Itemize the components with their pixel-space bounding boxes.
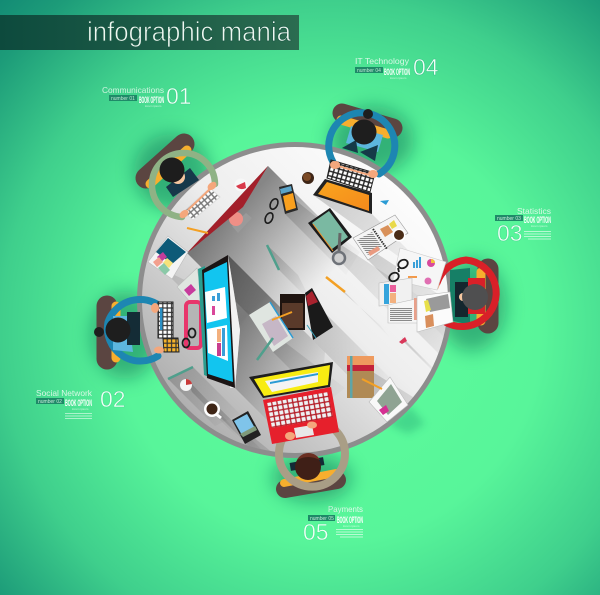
label: 04 it technology xyxy=(355,54,439,80)
open spiral notebook xyxy=(353,215,408,260)
laptop keyboard xyxy=(267,392,333,428)
blue paper plane xyxy=(380,200,389,205)
label: 01 communications: number 01 xyxy=(111,96,135,102)
shirt and trousers xyxy=(113,312,140,352)
hands xyxy=(178,180,218,220)
teal gap xyxy=(450,268,470,325)
laptop orange xyxy=(313,179,372,214)
label: 02 social network: Social Network xyxy=(36,388,93,398)
person 3: statistics xyxy=(432,260,496,327)
label: 03 statistics: lorem ipsum xyxy=(531,224,548,228)
orange pencil on book xyxy=(362,379,382,389)
label: 05 payments: 05 xyxy=(303,519,329,545)
title banner xyxy=(0,15,299,50)
head with bun xyxy=(94,318,130,342)
person 4: it technology xyxy=(327,109,395,192)
orange pencil upper xyxy=(326,277,345,292)
pie ball lower xyxy=(180,379,192,391)
head xyxy=(459,284,488,310)
label: 03 statistics: 03 xyxy=(497,220,523,246)
chair xyxy=(107,306,116,359)
hair and neck xyxy=(160,158,185,184)
arms ring xyxy=(152,153,215,217)
coffee cup bottom xyxy=(204,401,221,418)
label: 02 social network: lorem ipsum xyxy=(72,407,89,411)
pink pin xyxy=(399,337,407,344)
keyboard xyxy=(183,188,220,220)
document with dark blue cover xyxy=(148,236,188,279)
label: 04 it technology: IT Technology xyxy=(355,56,410,66)
label: 02 social network xyxy=(36,386,126,419)
glasses left xyxy=(182,328,196,348)
coffee cup right xyxy=(392,228,406,242)
label: 02 social network: BOOK OPTION xyxy=(65,398,92,408)
label: 03 statistics: Statistics xyxy=(517,206,551,216)
chair xyxy=(341,113,393,134)
label: 01 communications xyxy=(102,83,192,109)
text: BOOK OPTION xyxy=(524,215,551,225)
glasses right xyxy=(388,258,409,283)
paper with pink square xyxy=(369,377,408,422)
person 2: social network xyxy=(94,299,179,361)
label: 01 communications: Communications xyxy=(102,85,164,95)
tablet xyxy=(232,411,261,444)
screen panel bottom xyxy=(207,325,228,361)
screen panel top xyxy=(205,287,227,323)
trousers xyxy=(290,457,324,471)
chair xyxy=(284,473,337,489)
coffee cup top xyxy=(302,172,314,184)
orange pencil on document xyxy=(272,312,292,320)
arms ring xyxy=(107,299,158,361)
label: 05 payments: lorem ipsum xyxy=(343,524,360,528)
label: 01 communications: BOOK OPTION xyxy=(139,95,164,105)
hands xyxy=(151,303,164,354)
label: 04 it technology: number 04 xyxy=(357,68,381,74)
title banner: infographic mania xyxy=(87,16,291,47)
wallet and black notebook xyxy=(280,288,333,340)
chair xyxy=(481,269,488,323)
label: 04 it technology: lorem ipsum xyxy=(390,76,407,80)
smartphone xyxy=(279,184,298,214)
glasses top xyxy=(264,198,279,224)
pie ball xyxy=(234,178,248,192)
document with blue edge xyxy=(249,302,293,352)
label: 05 payments xyxy=(303,504,363,545)
large monitor xyxy=(198,255,240,388)
label: 03 statistics: number 03 xyxy=(497,216,521,222)
green pencil xyxy=(267,245,279,270)
green notebook xyxy=(308,208,352,253)
orange pencil xyxy=(187,228,208,233)
label: 02 social network: 02 xyxy=(100,386,126,412)
red computer monitor xyxy=(187,166,268,253)
person 1: communications xyxy=(146,144,220,220)
arms ring xyxy=(437,260,496,327)
green pencil left xyxy=(168,367,193,379)
head xyxy=(295,453,321,480)
small document with pink square xyxy=(177,268,203,312)
round table xyxy=(137,142,453,458)
chair xyxy=(146,144,187,184)
label: 05 payments: number 05 xyxy=(310,516,334,522)
label: 02 social network: number 02 xyxy=(38,399,62,405)
keyboard xyxy=(327,160,375,192)
papers stack xyxy=(379,278,453,332)
trousers xyxy=(166,168,199,197)
red laptop xyxy=(249,362,339,444)
green pencil lower xyxy=(257,338,273,360)
hands xyxy=(432,278,446,325)
shirt xyxy=(346,126,383,152)
head with bun xyxy=(352,109,376,144)
label: 04 it technology: BOOK OPTION xyxy=(384,67,410,77)
label: 05 payments: Payments xyxy=(328,504,363,514)
pink frame xyxy=(186,302,201,348)
trousers xyxy=(342,140,358,153)
label: 01 communications: lorem ipsum xyxy=(145,104,162,108)
chart paper xyxy=(393,248,446,290)
person and table drop shadows xyxy=(91,106,506,502)
keyboard xyxy=(158,302,179,352)
arms ring xyxy=(329,113,395,174)
shirt xyxy=(468,278,485,314)
trousers xyxy=(455,282,468,317)
arms ring xyxy=(279,430,345,487)
shadow of table on background xyxy=(388,406,425,434)
person 5: payments xyxy=(279,430,345,489)
text: BOOK OPTION xyxy=(337,515,363,525)
brown book xyxy=(347,356,374,398)
phone in hands xyxy=(285,422,317,440)
label: 01 communications: 01 xyxy=(166,83,192,109)
long diagonal shadows on table xyxy=(169,166,446,450)
hands xyxy=(330,161,378,178)
magnifier xyxy=(333,233,345,264)
label: 03 statistics xyxy=(495,206,551,246)
label: 04 it technology: 04 xyxy=(413,54,439,80)
